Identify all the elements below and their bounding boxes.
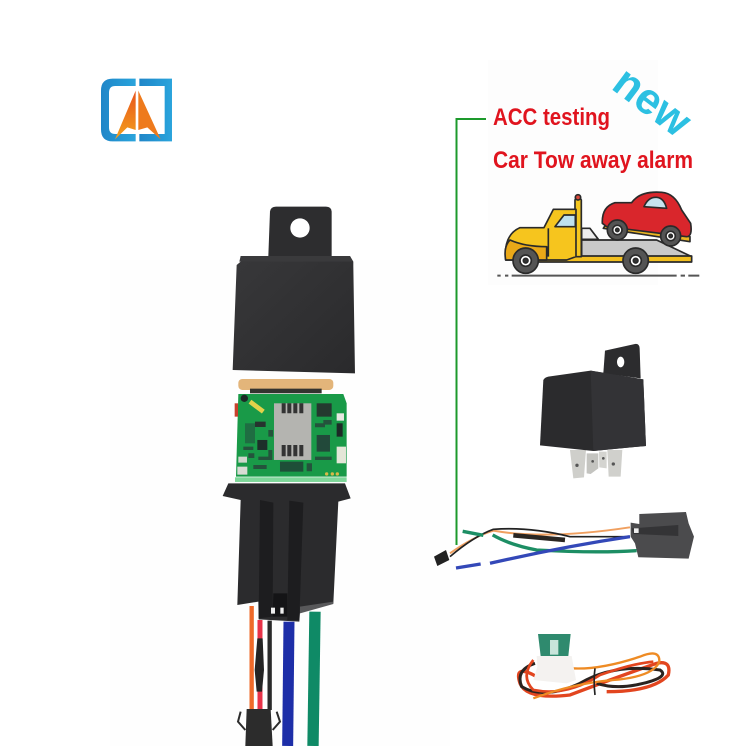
relay product photo <box>540 344 646 478</box>
label: new: new <box>604 57 701 147</box>
label: ACC testing: ACC testing <box>493 104 610 131</box>
green connector line <box>456 119 486 545</box>
main device: circuit board <box>235 379 347 482</box>
main device: relay cover <box>233 207 355 373</box>
icon: tow truck carrying red car <box>497 192 699 276</box>
logo <box>101 79 172 141</box>
main device: base housing <box>223 483 351 622</box>
fuse and power wire harness <box>519 634 669 698</box>
label: Car Tow away alarm: Car Tow away alarm <box>493 147 693 174</box>
main device: coloured wires and connector <box>238 606 315 746</box>
relay socket and wiring harness <box>434 512 694 568</box>
